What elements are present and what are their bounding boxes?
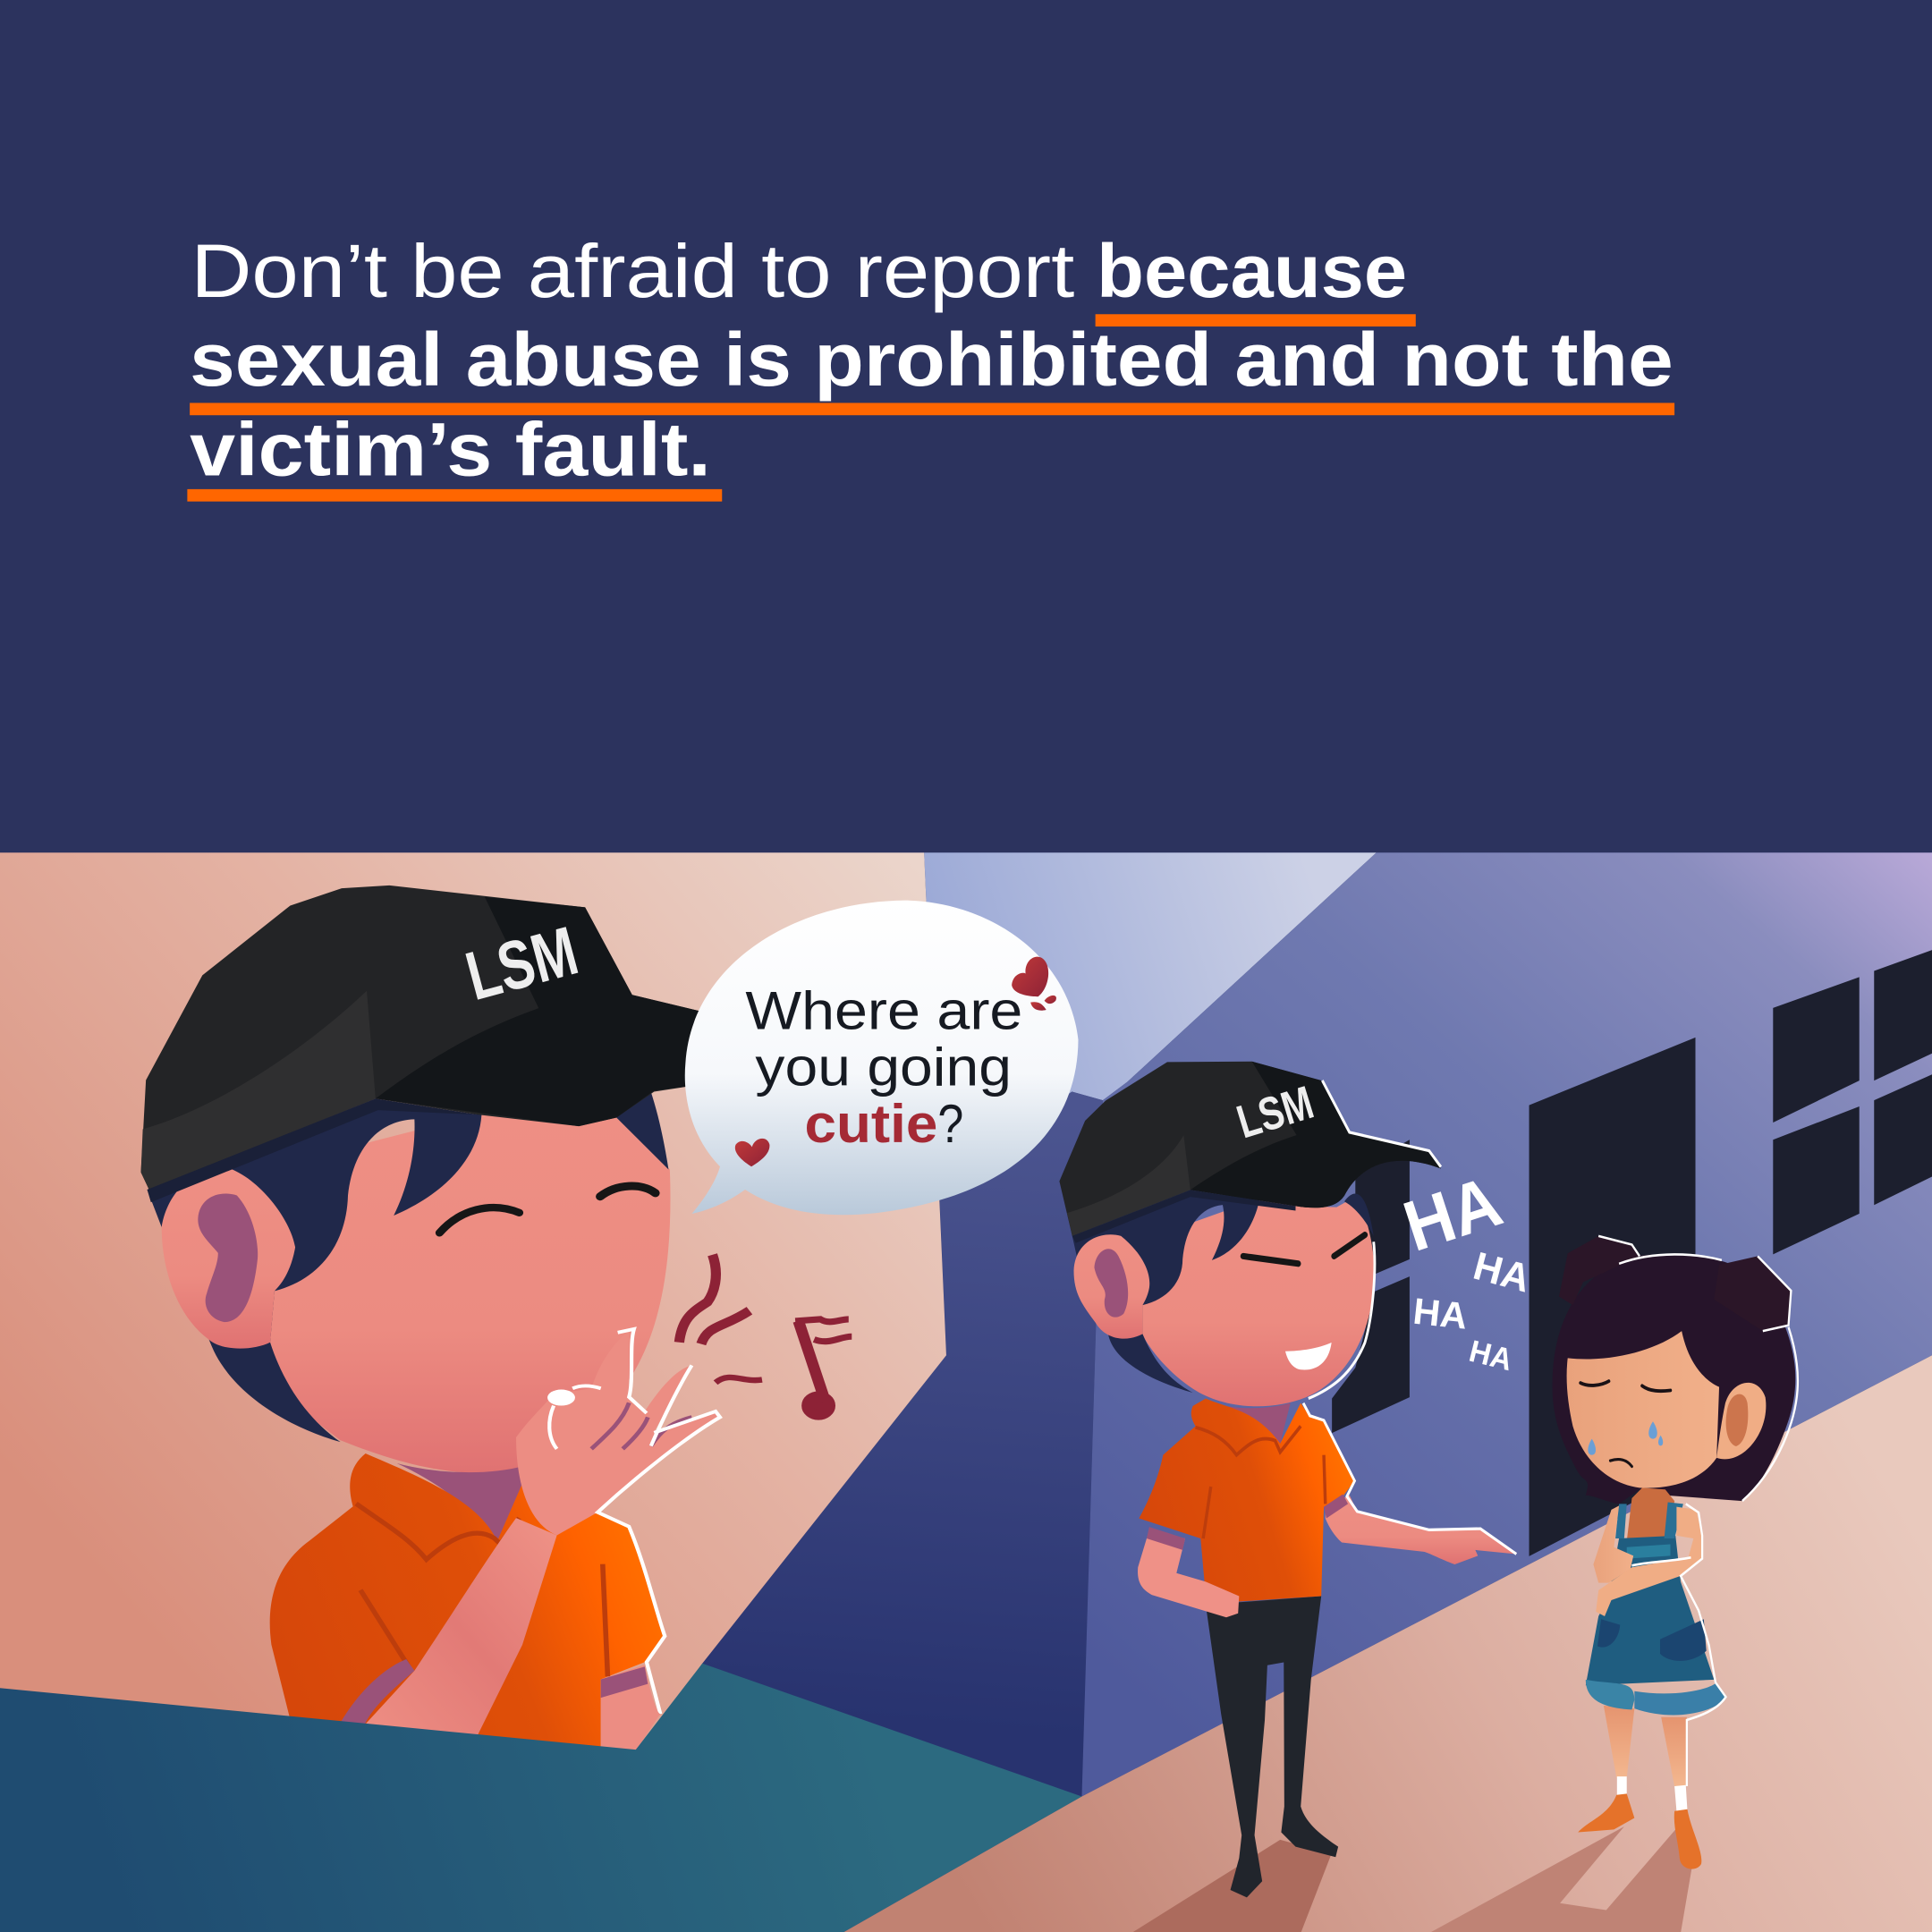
laughter 3: HA	[1411, 1291, 1470, 1337]
hand	[516, 1331, 720, 1535]
cuffs	[1586, 1680, 1634, 1709]
left arm	[1138, 1530, 1239, 1617]
hair white outline	[1598, 1236, 1798, 1501]
heading line 1 regular: Don’t be afraid to report	[191, 229, 1074, 313]
character: girl	[1552, 1236, 1798, 1869]
heading line 2: sexual abuse is prohibited and not the	[190, 318, 1674, 402]
pointing arm	[1326, 1496, 1516, 1564]
right sleeve band	[1324, 1494, 1348, 1519]
floor shadows	[1131, 1826, 1693, 1932]
character: man pointing	[1059, 1062, 1798, 1897]
sleeve band right	[601, 1666, 648, 1698]
socks	[1617, 1776, 1687, 1811]
arm	[364, 1518, 557, 1740]
bubble text: you going	[755, 1037, 1012, 1097]
neck	[397, 1463, 526, 1546]
finger details	[591, 1402, 691, 1449]
cap	[1059, 1062, 1441, 1243]
hair right side	[1344, 1194, 1374, 1236]
pants	[1206, 1596, 1338, 1897]
whistle marks	[679, 1255, 762, 1383]
heading line 1 bold: because	[1097, 229, 1407, 313]
hair	[148, 1106, 481, 1442]
bubble text: ?	[937, 1093, 963, 1154]
crossed arm lower	[1596, 1507, 1702, 1616]
orange underlines	[187, 314, 1674, 502]
hand white outlines	[549, 1329, 720, 1714]
bubble shape	[685, 901, 1078, 1215]
pockets	[1597, 1619, 1707, 1661]
inner ear	[1094, 1249, 1128, 1318]
white fingernail	[547, 1390, 575, 1406]
smile	[1285, 1343, 1332, 1370]
scene background	[0, 852, 1932, 1932]
overalls	[1586, 1536, 1714, 1685]
laughter text	[1394, 1161, 1535, 1377]
bib pocket	[1627, 1544, 1671, 1559]
tears	[1588, 1421, 1663, 1455]
neck	[1206, 1400, 1291, 1444]
collar lines	[1196, 1426, 1326, 1538]
closed eyes	[439, 1186, 656, 1233]
bubble text	[745, 979, 1022, 1154]
shirt	[270, 1453, 664, 1754]
shoes	[1578, 1793, 1701, 1869]
laughter 2: HA	[1469, 1244, 1535, 1301]
cap logo: LSM: LSM	[458, 912, 586, 1015]
header panel background	[0, 0, 1932, 852]
face	[1090, 1196, 1375, 1406]
hair buns	[1559, 1236, 1640, 1305]
bubble text: cutie	[805, 1093, 937, 1154]
cap logo: LSM small: LSM	[1231, 1077, 1319, 1148]
ear	[1073, 1234, 1149, 1339]
crossed arm upper	[1593, 1505, 1633, 1583]
heart top right	[1012, 957, 1056, 1011]
girl white outline	[1631, 1504, 1726, 1786]
ear	[162, 1167, 295, 1349]
shirt	[1139, 1399, 1354, 1602]
legs	[1604, 1706, 1634, 1777]
girl ear	[1716, 1383, 1766, 1459]
inner ear	[198, 1193, 258, 1322]
laughter large: HA	[1394, 1161, 1511, 1267]
heading line 3: victim’s fault.	[190, 408, 711, 492]
laughter 4: HA	[1466, 1335, 1516, 1377]
hair	[1072, 1191, 1259, 1393]
left sleeve band	[1147, 1527, 1185, 1550]
girl face	[1567, 1331, 1719, 1488]
hair back	[1552, 1254, 1795, 1504]
heading text	[190, 229, 1674, 492]
speech bubble	[685, 901, 1078, 1215]
face white outline	[1309, 1241, 1375, 1399]
white outline of man	[1303, 1403, 1516, 1554]
girl inner ear	[1726, 1394, 1748, 1446]
sleeve inner left	[341, 1659, 414, 1725]
hair right side	[616, 1083, 668, 1169]
floor	[844, 1355, 1932, 1932]
heart lower left	[735, 1139, 769, 1166]
face	[162, 1114, 670, 1473]
straps	[1615, 1502, 1683, 1538]
top	[1627, 1487, 1674, 1541]
forearm right	[601, 1665, 660, 1751]
bubble text: Where are	[745, 979, 1022, 1040]
girl eyes and mouth	[1580, 1381, 1671, 1467]
door and windows	[1332, 950, 1932, 1556]
shirt fold lines	[356, 1504, 607, 1676]
cap	[141, 886, 704, 1202]
eyes	[1243, 1235, 1365, 1264]
character: close-up man whistling	[141, 886, 852, 1754]
table foreground	[0, 1664, 1081, 1932]
music note	[795, 1319, 852, 1415]
